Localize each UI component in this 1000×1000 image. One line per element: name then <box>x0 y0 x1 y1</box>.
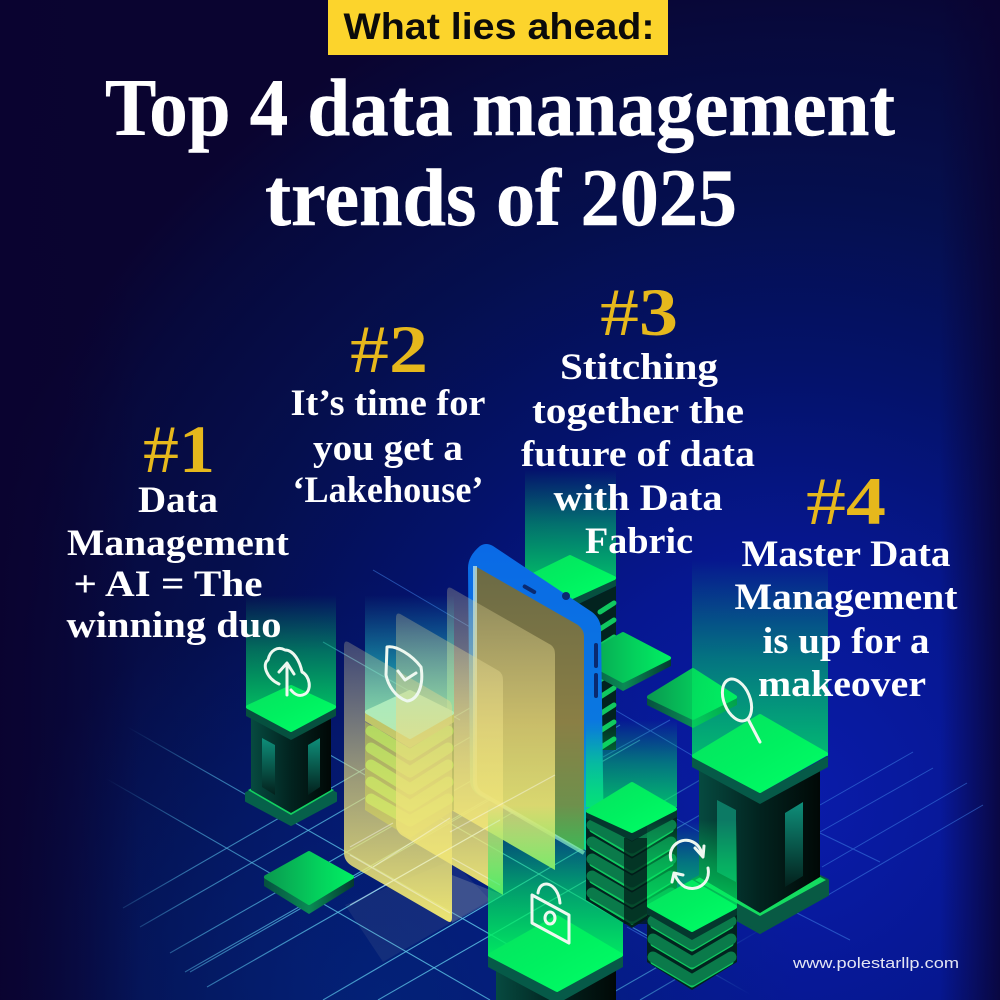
pillar 4: magnifier <box>692 560 828 933</box>
trend 1: Management <box>67 523 290 564</box>
stack: middle <box>586 720 677 928</box>
trend 2: ‘Lakehouse’ <box>292 470 484 511</box>
tile: upper right <box>647 670 737 728</box>
phone <box>468 544 604 856</box>
trend 4: Management <box>734 577 958 618</box>
trend 4: is up for a <box>762 621 930 662</box>
title: Top 4 data management <box>105 62 895 153</box>
icon: cloud upload <box>265 648 309 695</box>
trend 4: Master Data <box>742 534 950 575</box>
stack: centre server <box>365 595 454 838</box>
trend 3: future of data <box>521 434 755 475</box>
icon: padlock <box>532 884 569 943</box>
pillar: lock <box>488 805 623 1000</box>
grid lines over panels <box>350 775 555 913</box>
trend 2: you get a <box>313 428 463 469</box>
trend 3: Stitching <box>560 347 719 388</box>
header tag: What lies ahead: <box>344 6 654 47</box>
title: trends of 2025 <box>265 152 737 243</box>
website url: www.polestarllp.com <box>792 955 959 972</box>
header tag <box>328 0 668 55</box>
icon: shield <box>386 647 422 701</box>
trend 2 <box>290 311 486 511</box>
trend 1: + AI = The <box>74 564 262 605</box>
trend 1: winning duo <box>66 605 282 646</box>
isometric grid lines <box>53 570 983 1000</box>
trend 3: Fabric <box>585 521 693 562</box>
icon: sync arrows <box>670 840 708 888</box>
trend 1 <box>66 411 290 646</box>
trend 1: Data <box>138 480 218 521</box>
trend 3: together the <box>532 391 744 432</box>
panel: back translucent layer <box>447 588 555 870</box>
trend 3: #3 <box>600 274 678 350</box>
trend 2: It’s time for <box>290 383 486 424</box>
trend 4: makeover <box>758 664 926 705</box>
pillar 1: cloud upload <box>246 595 336 825</box>
trend 4 <box>734 463 958 705</box>
trend 4: #4 <box>806 463 886 539</box>
panel: middle translucent layer <box>396 614 503 895</box>
panel: front translucent layer <box>344 642 452 922</box>
floor shadow under panels <box>345 860 503 962</box>
tile: lower left <box>264 853 354 914</box>
tile: right of phone <box>578 634 671 691</box>
trend 1: #1 <box>143 411 215 487</box>
stack: low <box>647 820 737 990</box>
icon: magnifying glass <box>717 675 760 742</box>
trend 3: with Data <box>554 478 722 519</box>
stack: back server (behind phone) <box>525 470 616 750</box>
title <box>105 62 895 243</box>
trend 3 <box>521 274 755 562</box>
trend 2: #2 <box>350 311 428 387</box>
